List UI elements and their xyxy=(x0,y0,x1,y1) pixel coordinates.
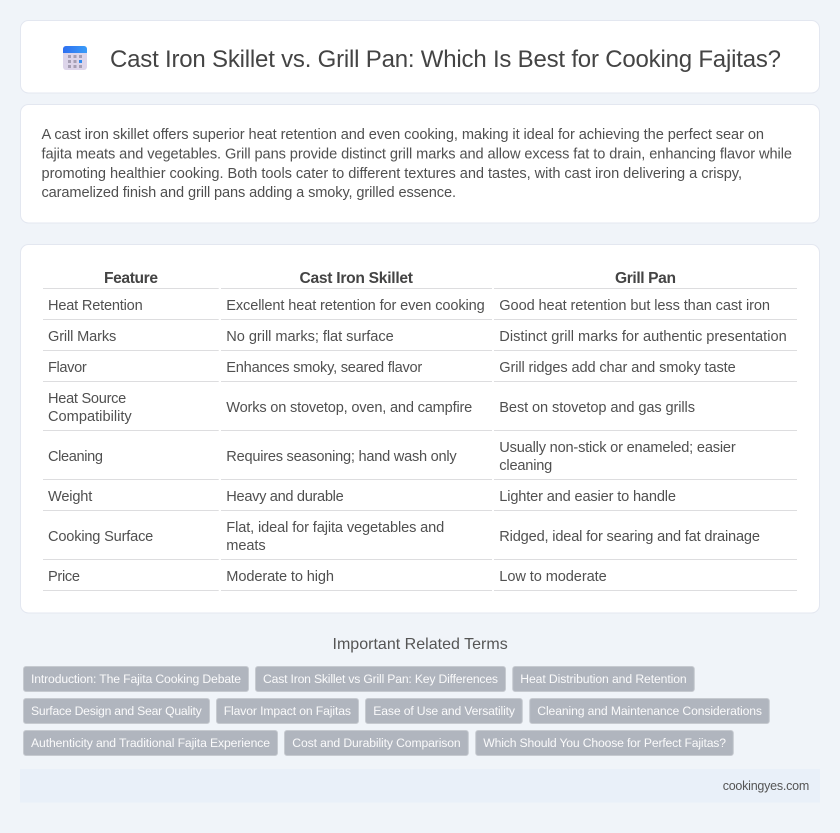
row: heat source compatibility: Best on stovetop and gas grills xyxy=(499,400,695,416)
tag: Introduction: The Fajita Cooking Debate xyxy=(31,672,241,686)
row: heat retention: Excellent heat retention for even cooking xyxy=(226,298,485,314)
tag xyxy=(24,666,248,692)
tag: Cast Iron Skillet vs Grill Pan: Key Differences xyxy=(263,672,498,686)
heading: important related terms: Important Related Terms xyxy=(332,636,508,653)
row: weight: Weight xyxy=(48,489,92,505)
tag: Flavor Impact on Fajitas xyxy=(224,704,351,718)
tag group: related terms xyxy=(24,666,769,756)
table header row: Feature xyxy=(104,270,158,287)
tag xyxy=(216,698,358,724)
row: price: Price xyxy=(48,569,80,585)
row: weight: Lighter and easier to handle xyxy=(499,489,676,505)
row: flavor xyxy=(48,360,736,376)
tag xyxy=(24,730,278,756)
tag: Cost and Durability Comparison xyxy=(292,736,461,750)
icon: calendar xyxy=(63,46,87,70)
row: heat source compatibility xyxy=(48,391,695,425)
row: grill marks xyxy=(48,329,787,345)
row: flavor: Grill ridges add char and smoky taste xyxy=(499,360,736,376)
tag xyxy=(24,698,210,724)
panel: introduction text: A cast iron skillet offers superior heat retention and even cooking, making it ideal for achieving the perfect sear on xyxy=(42,127,764,143)
footer bar: cookingyes.com xyxy=(723,779,809,793)
row: weight xyxy=(48,489,676,505)
row: cooking surface: Ridged, ideal for searing and fat drainage xyxy=(499,529,760,545)
tag: Authenticity and Traditional Fajita Experience xyxy=(31,736,270,750)
tag: Heat Distribution and Retention xyxy=(520,672,687,686)
row: weight: Heavy and durable xyxy=(226,489,344,505)
tag: Cleaning and Maintenance Considerations xyxy=(537,704,762,718)
row: cooking surface: Cooking Surface xyxy=(48,529,153,545)
row: grill marks: Grill Marks xyxy=(48,329,116,345)
panel: introduction text: promoting healthier cooking. Both tools cater to different textures and tastes, with cast iron delivering a crispy, xyxy=(42,166,742,182)
row: cooking surface: meats xyxy=(226,538,266,554)
row: grill marks: Distinct grill marks for authentic presentation xyxy=(499,329,787,345)
row: heat retention xyxy=(48,298,770,314)
row: cleaning: Cleaning xyxy=(48,449,103,465)
row: cleaning xyxy=(48,440,736,474)
panel: introduction text: caramelized finish and grill pans adding a smoky, grilled essence. xyxy=(42,185,456,201)
footer bar xyxy=(20,769,820,802)
tag xyxy=(284,730,468,756)
row: cleaning: Requires seasoning; hand wash only xyxy=(226,449,457,465)
row: flavor: Flavor xyxy=(48,360,87,376)
row: price: Moderate to high xyxy=(226,569,334,585)
tag: Which Should You Choose for Perfect Fajitas? xyxy=(483,736,726,750)
row: price: Low to moderate xyxy=(499,569,607,585)
row: flavor: Enhances smoky, seared flavor xyxy=(226,360,422,376)
panel: introduction text xyxy=(20,104,820,223)
panel: comparison table xyxy=(20,244,820,613)
row: cooking surface xyxy=(48,520,760,554)
row: cooking surface: Flat, ideal for fajita vegetables and xyxy=(226,520,444,536)
row: grill marks: No grill marks; flat surface xyxy=(226,329,394,345)
tag: Surface Design and Sear Quality xyxy=(31,704,203,718)
panel: title header xyxy=(20,20,820,93)
row: price xyxy=(48,569,607,585)
title: Cast Iron Skillet vs. Grill Pan: Which Is Best for Cooking Fajitas? xyxy=(110,46,781,73)
panel: introduction text: fajita meats and vegetables. Grill pans provide distinct grill marks and allow excess fat to drain, enhancing flavor while xyxy=(42,146,792,162)
row: heat source compatibility: Compatibility xyxy=(48,409,132,425)
row: heat retention: Heat Retention xyxy=(48,298,143,314)
tag xyxy=(256,666,506,692)
table header row: Grill Pan xyxy=(615,270,676,287)
tag xyxy=(530,698,769,724)
row: cleaning: Usually non-stick or enameled; easier xyxy=(499,440,736,456)
row: heat source compatibility: Heat Source xyxy=(48,391,126,407)
tag: Ease of Use and Versatility xyxy=(373,704,516,718)
row: heat source compatibility: Works on stovetop, oven, and campfire xyxy=(226,400,472,416)
table header row: Cast Iron Skillet xyxy=(300,270,413,287)
tag xyxy=(476,730,733,756)
table header row xyxy=(104,270,676,287)
tag xyxy=(366,698,522,724)
row: cleaning: cleaning xyxy=(499,458,552,474)
tag xyxy=(513,666,694,692)
row: heat retention: Good heat retention but less than cast iron xyxy=(499,298,770,314)
